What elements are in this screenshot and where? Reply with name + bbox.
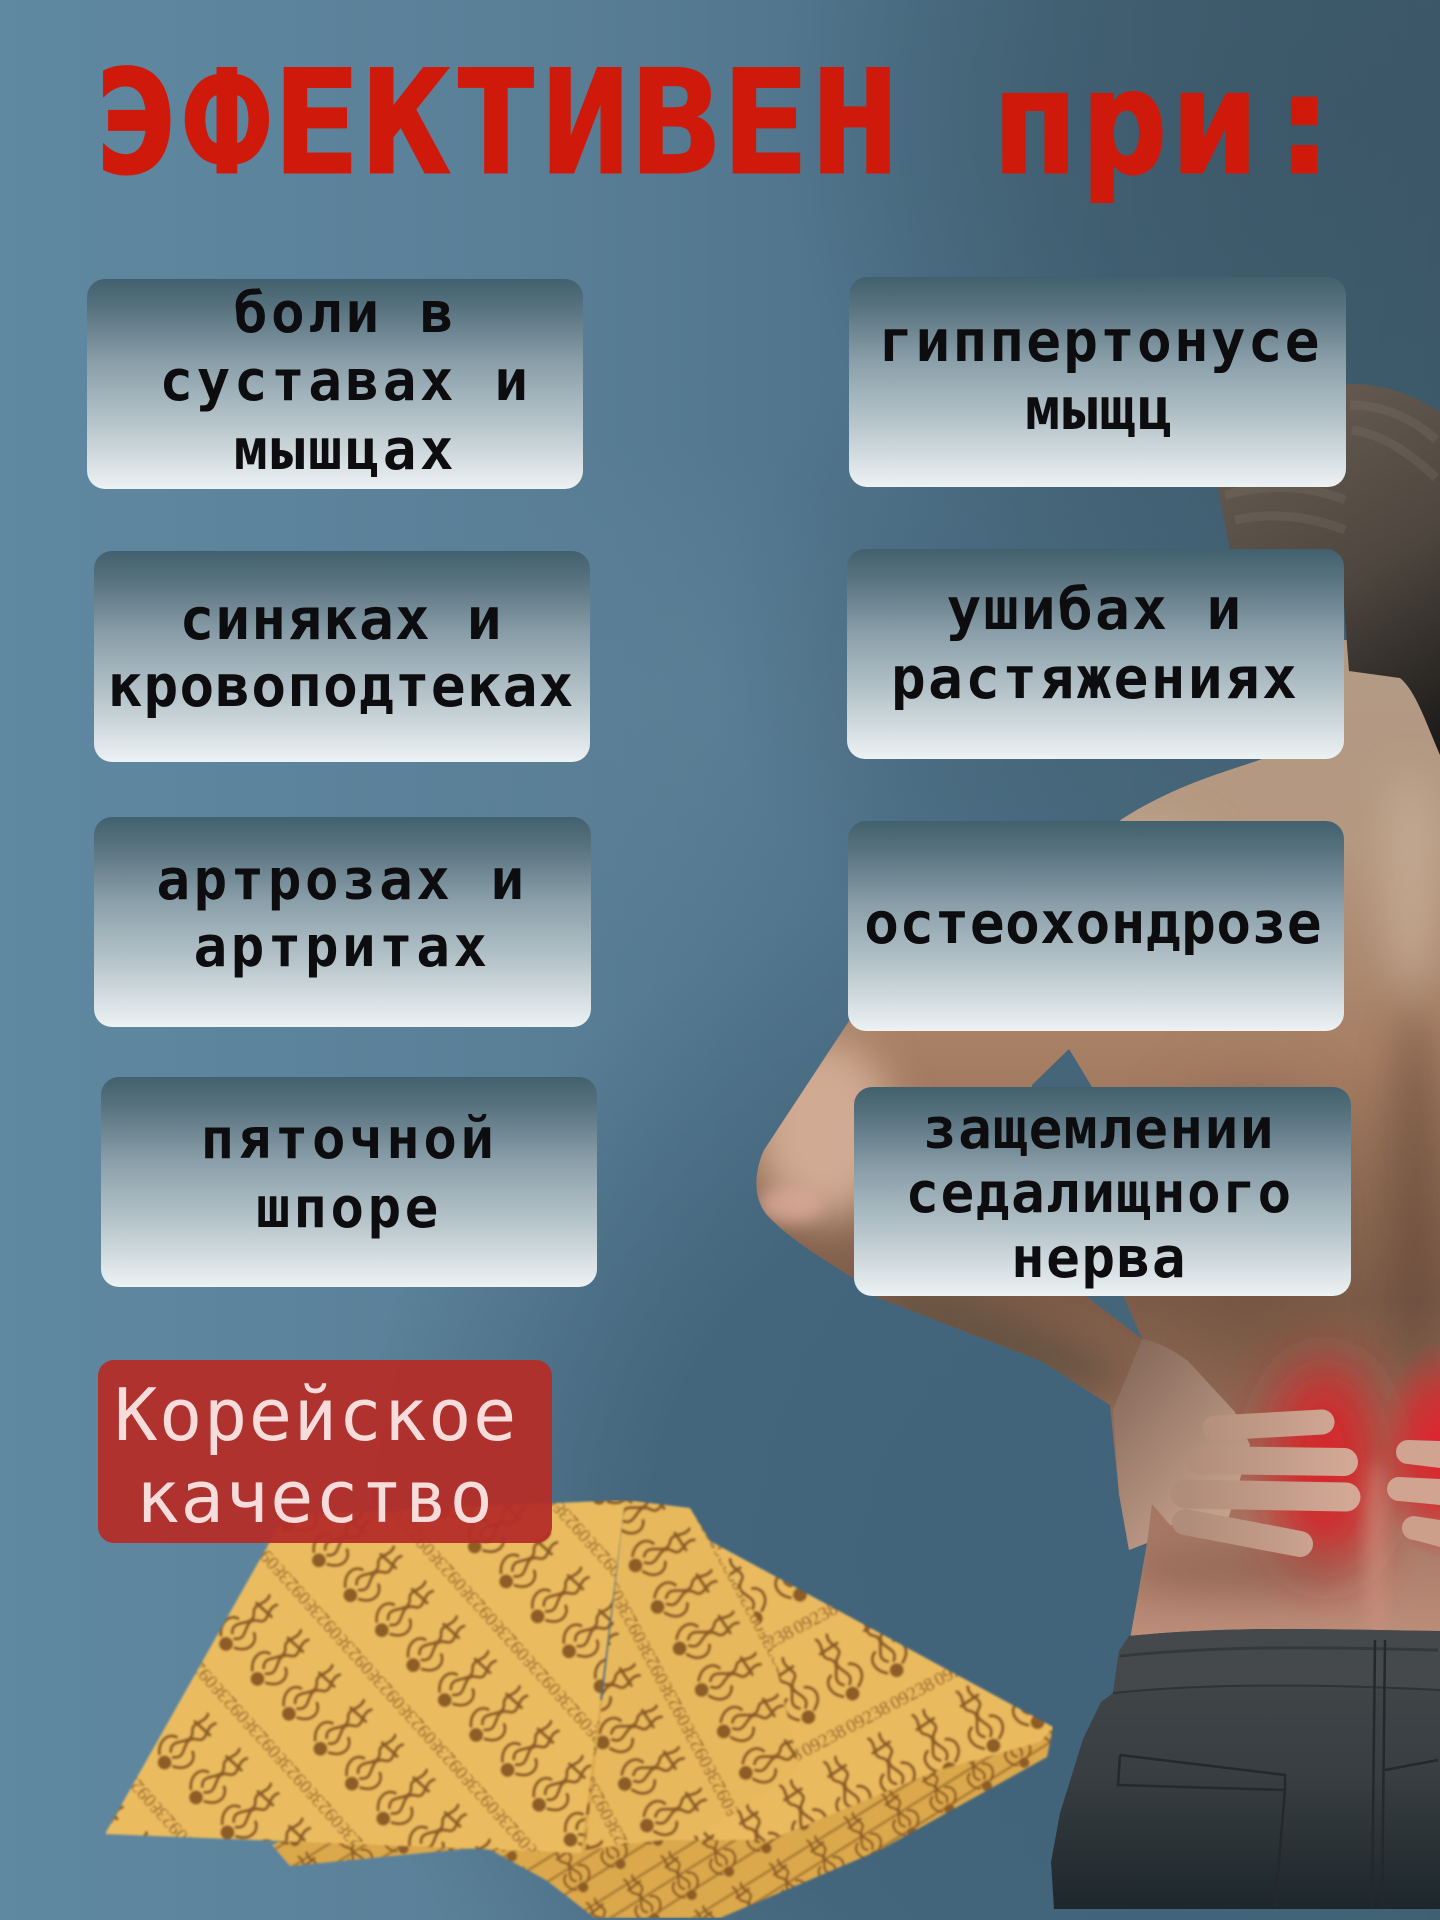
card: muscle hypertonus: мыщц <box>1025 375 1175 443</box>
card: heel spur: пяточной <box>201 1107 497 1172</box>
sheet fan middle <box>585 1500 800 1850</box>
card: joints and muscles: боли в <box>234 281 457 346</box>
fingers <box>1185 1422 1346 1544</box>
card: arthrosis: артритах <box>194 915 490 980</box>
patches stack <box>105 1500 1053 1918</box>
second hand fingers <box>1387 1440 1440 1547</box>
title: ЭФЕКТИВЕН при: <box>94 41 1351 206</box>
card: arthrosis <box>94 817 591 1027</box>
main sheet <box>105 1500 625 1853</box>
card: muscle hypertonus: гиппертонусе <box>878 307 1322 375</box>
card: bruises: кровоподтеках <box>108 652 574 720</box>
card: sprains: ушибах и <box>947 575 1243 643</box>
gap between arm and torso <box>1032 1049 1142 1339</box>
card: osteochondrosis: остеохондрозе <box>864 889 1322 957</box>
badge: Korean quality: качество <box>136 1455 494 1539</box>
card: sprains: растяжениях <box>891 644 1299 712</box>
card: joints and muscles <box>87 279 583 489</box>
card: heel spur <box>101 1077 597 1287</box>
badge: Korean quality <box>98 1360 552 1543</box>
badge: Korean quality: Корейское <box>114 1373 518 1457</box>
card: bruises: синяках и <box>179 585 503 653</box>
card: sciatic nerve <box>854 1087 1351 1296</box>
card: joints and muscles: суставах и <box>159 349 532 414</box>
card: arthrosis: артрозах и <box>156 848 528 913</box>
sheet fan right <box>585 1503 1053 1840</box>
hair <box>1218 384 1440 755</box>
card: sciatic nerve: защемлении <box>923 1097 1275 1162</box>
red glow <box>1270 1363 1380 1573</box>
card: bruises <box>94 551 590 762</box>
hand palm <box>1113 1339 1250 1550</box>
shorts <box>1051 1629 1440 1909</box>
card: sciatic nerve: нерва <box>1011 1226 1187 1291</box>
card: muscle hypertonus <box>849 277 1346 487</box>
card: sciatic nerve: седалищного <box>905 1161 1293 1226</box>
card: joints and muscles: мышцах <box>234 418 457 483</box>
photo: man holding lower back <box>740 384 1440 1909</box>
card: sprains <box>847 549 1344 759</box>
lower sheets <box>272 1700 1053 1918</box>
card: osteochondrosis <box>848 821 1344 1031</box>
body skin <box>740 630 1440 1650</box>
card: heel spur: шпоре <box>256 1176 442 1241</box>
